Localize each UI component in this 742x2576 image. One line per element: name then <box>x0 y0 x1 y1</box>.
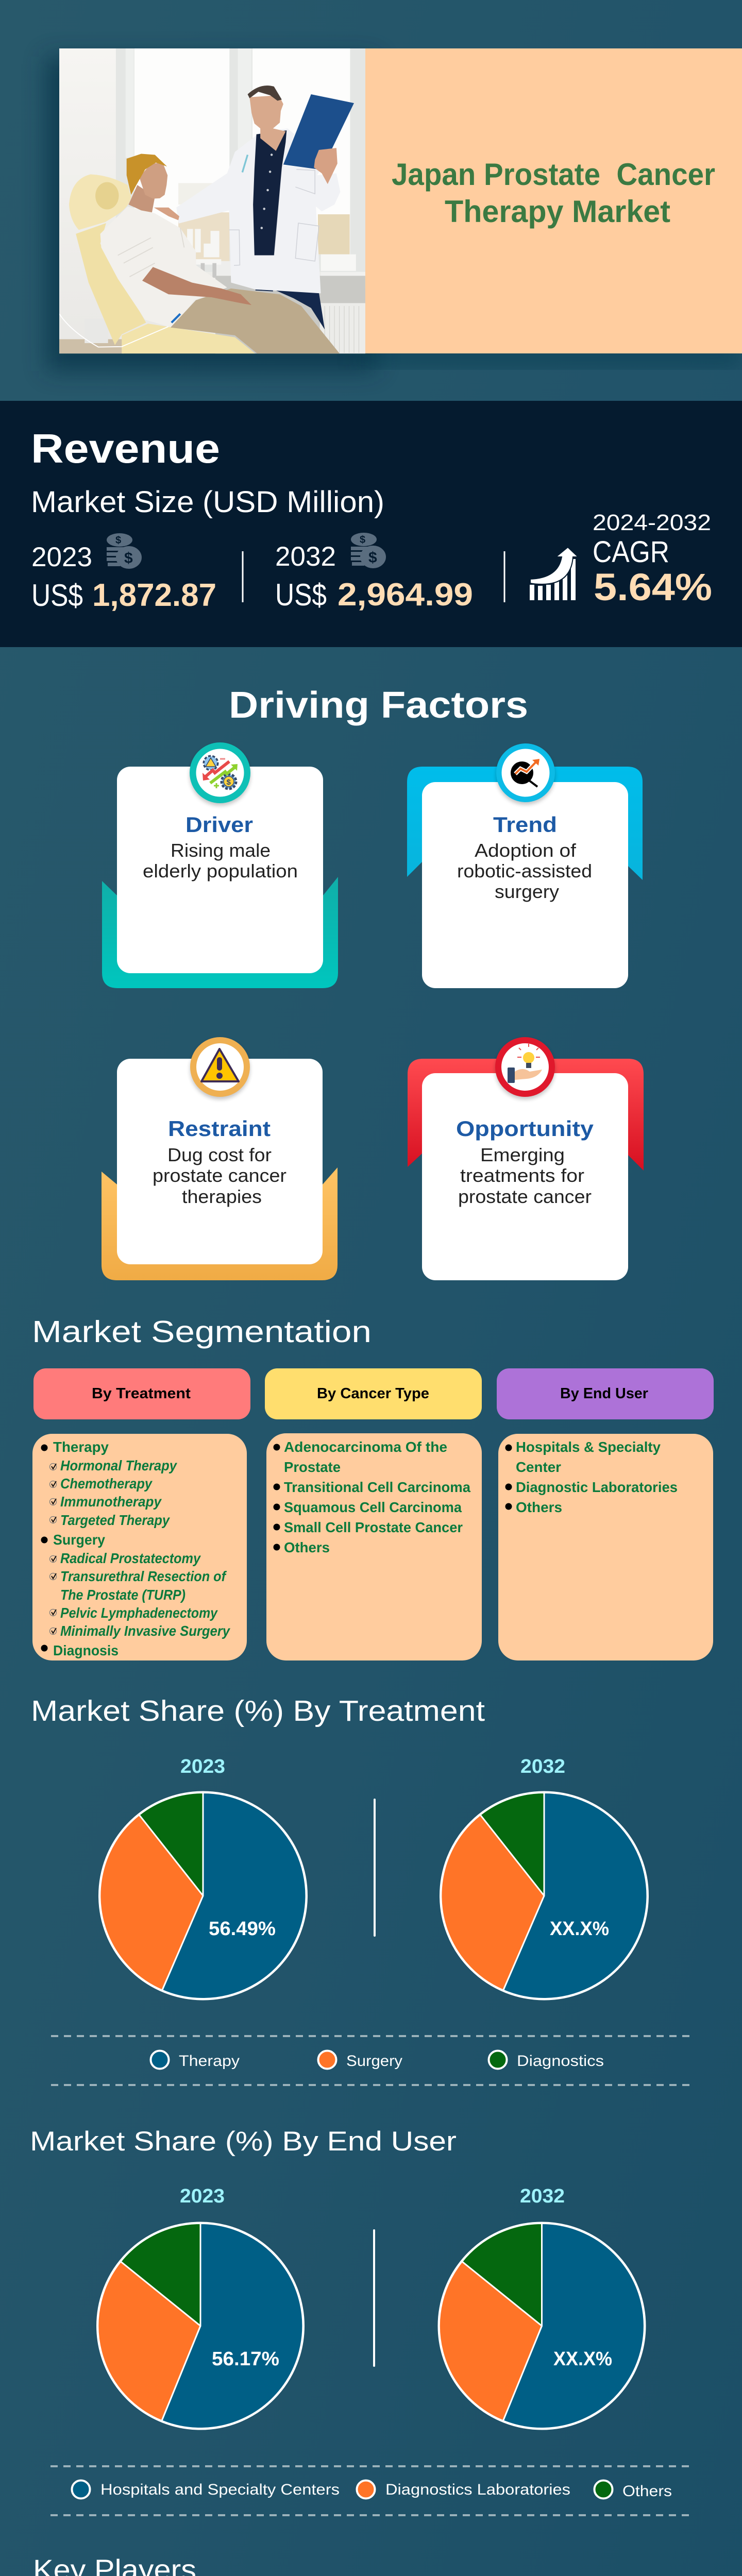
CAGR: CAGR <box>593 535 669 569</box>
text: restraint <box>153 1116 286 1207</box>
icon: driver arrows and gears <box>203 756 238 789</box>
bullets <box>505 1445 512 1510</box>
heading: revenue: Revenue <box>31 426 220 471</box>
list text: The Prostate (TURP) <box>60 1587 185 1603</box>
text: driver: elderly population <box>143 860 298 882</box>
chair <box>69 174 131 230</box>
icon: coins 2023 <box>107 533 142 569</box>
bullets <box>41 1445 47 1652</box>
segment header: by cancer type <box>265 1368 482 1419</box>
CAGR: 2024-2032 <box>593 510 711 535</box>
bullets <box>273 1444 280 1551</box>
text: trend: Adoption of <box>475 840 577 861</box>
chart: end user pie 2032 <box>439 2185 644 2429</box>
doctor shirt <box>253 130 286 256</box>
CAGR: 5.64% <box>594 566 712 608</box>
card: opportunity <box>408 1037 644 1280</box>
icon: coins 2023: $ <box>124 550 133 567</box>
revenue panel <box>0 401 742 647</box>
segment header: by end user: By End User <box>560 1385 648 1402</box>
list text: Transurethral Resection of <box>60 1568 227 1584</box>
segment header: by treatment: By Treatment <box>92 1385 191 1402</box>
list text: Targeted Therapy <box>60 1512 170 1528</box>
text: opportunity: Emerging <box>480 1144 565 1165</box>
icon: driver arrows and gears: $ <box>227 778 231 787</box>
legend: treatment: Diagnostics <box>517 2053 604 2070</box>
title: Therapy Market <box>445 194 670 229</box>
2032 value: 2,964.99 <box>338 577 473 613</box>
list text: Diagnostic Laboratories <box>516 1479 678 1495</box>
2032 value: US$ <box>275 578 327 612</box>
text: opportunity <box>456 1116 594 1207</box>
subheading: market size: Market Size (USD Million) <box>31 485 384 519</box>
text: driver: Rising male <box>171 840 271 861</box>
text: restraint: therapies <box>182 1186 262 1207</box>
2023 value: 2023 <box>31 542 92 572</box>
chart: end user pie 2023: 2023 <box>180 2185 225 2207</box>
legend: treatment: Surgery <box>346 2053 402 2070</box>
list text: Adenocarcinoma Of the <box>284 1439 447 1455</box>
CAGR <box>593 510 712 608</box>
list text <box>284 1439 470 1555</box>
legend: treatment <box>150 2050 604 2070</box>
chart: treatment pie 2032 <box>441 1756 647 1999</box>
list text: Squamous Cell Carcinoma <box>284 1499 462 1515</box>
legend: end user: Diagnostics Laboratories <box>385 2481 570 2498</box>
segment list: end user <box>498 1434 713 1660</box>
title panel <box>365 48 742 353</box>
2032 value: 2032 <box>275 541 336 572</box>
card: trend <box>407 743 643 988</box>
list text: Hormonal Therapy <box>60 1458 177 1473</box>
2032 value <box>275 541 473 613</box>
segment header: by cancer type: By Cancer Type <box>317 1385 429 1402</box>
cable <box>59 314 168 347</box>
segment list: treatment <box>32 1434 247 1660</box>
list text: Therapy <box>53 1439 109 1455</box>
list text: Prostate <box>284 1459 341 1475</box>
list text: Pelvic Lymphadenectomy <box>60 1605 218 1621</box>
card: driver <box>102 742 338 988</box>
heading: driving factors: Driving Factors <box>229 685 528 726</box>
list text: Small Cell Prostate Cancer <box>284 1519 463 1535</box>
text: opportunity: Opportunity <box>456 1116 594 1141</box>
heading: market share by treatment: Market Share (%) By Treatment <box>31 1694 485 1727</box>
doctor hands <box>154 148 338 220</box>
text: restraint: Dug cost for <box>167 1144 272 1165</box>
text: restraint: Restraint <box>168 1116 271 1141</box>
text: opportunity: treatments for <box>460 1165 584 1186</box>
doctor head <box>249 95 285 151</box>
divider <box>374 1799 376 1937</box>
chart: treatment pie 2023 <box>100 1756 306 1999</box>
icon: hand holding light bulb <box>508 1044 542 1083</box>
2023 value <box>31 542 216 613</box>
legend: end user: Hospitals and Specialty Centers <box>100 2481 340 2498</box>
list text: Hospitals & Specialty <box>516 1439 661 1455</box>
patient torso <box>100 207 227 328</box>
icon: coins 2032: $ <box>360 534 365 546</box>
divider <box>242 551 243 602</box>
list text: Others <box>516 1499 562 1515</box>
heading: market share by end user: Market Share (%) By End User <box>30 2126 457 2157</box>
chart: treatment pie 2032: XX.X% <box>550 1918 609 1940</box>
divider <box>373 2229 375 2367</box>
text: trend: surgery <box>495 881 559 902</box>
segment header: by treatment <box>33 1368 250 1419</box>
patient trousers <box>171 289 340 354</box>
chart: treatment pie 2023: 56.49% <box>209 1918 276 1940</box>
patient neck and face <box>128 185 155 212</box>
bottles and trolley <box>187 229 221 278</box>
2023 value: US$ <box>31 578 83 613</box>
title: Japan Prostate Cancer <box>392 157 715 192</box>
text: restraint: prostate cancer <box>153 1165 286 1186</box>
legend: treatment: Therapy <box>179 2053 240 2070</box>
list text: Others <box>284 1539 330 1555</box>
list text: Radical Prostatectomy <box>60 1550 201 1566</box>
doctor trousers <box>256 290 325 330</box>
divider <box>504 551 505 602</box>
text: opportunity: prostate cancer <box>458 1186 592 1207</box>
text: trend: Trend <box>493 812 557 837</box>
list text: Surgery <box>53 1532 105 1548</box>
icon: coins 2023: $ <box>115 535 121 546</box>
text: trend <box>457 812 592 902</box>
list text: Center <box>516 1459 561 1475</box>
doctor coat <box>176 128 340 293</box>
check marks <box>52 1464 56 1633</box>
chart: treatment pie 2023: 2023 <box>180 1756 225 1777</box>
2023 value: 1,872.87 <box>92 578 216 613</box>
icon: growth arrow <box>530 547 578 600</box>
list text: Transitional Cell Carcinoma <box>284 1479 470 1495</box>
icon: magnifier with trend line <box>511 759 539 787</box>
list text: Diagnosis <box>53 1642 119 1658</box>
check rings <box>49 1463 57 1634</box>
text: driver: Driver <box>185 812 253 837</box>
chart: end user pie 2023: 56.17% <box>212 2348 279 2370</box>
card: restraint <box>102 1037 338 1280</box>
icon: coins 2032 <box>351 533 386 568</box>
patient arm <box>142 267 251 305</box>
chart: end user pie 2032: 2032 <box>520 2185 565 2207</box>
clipboard <box>283 94 354 170</box>
segment header: by end user <box>497 1368 714 1419</box>
icon: warning triangle <box>201 1049 239 1081</box>
list text: Immunotherapy <box>60 1494 162 1510</box>
legend: end user <box>72 2480 672 2500</box>
beanie <box>127 154 167 195</box>
chart: end user pie 2032: XX.X% <box>553 2348 612 2370</box>
shirt buttons <box>261 154 273 229</box>
list text <box>516 1439 678 1515</box>
text: trend: robotic-assisted <box>457 860 592 882</box>
text: driver <box>143 812 298 882</box>
heading: market segmentation: Market Segmentation <box>32 1315 372 1349</box>
list text <box>53 1439 230 1658</box>
chart: end user pie 2023 <box>98 2185 303 2429</box>
list text: Chemotherapy <box>60 1476 153 1492</box>
segment list: cancer type <box>266 1433 482 1660</box>
photo: doctor and patient <box>59 48 365 354</box>
title <box>392 157 715 229</box>
list text: Minimally Invasive Surgery <box>60 1623 230 1639</box>
icon: coins 2032: $ <box>368 549 377 566</box>
stethoscope <box>242 155 248 173</box>
chart: treatment pie 2032: 2032 <box>520 1756 565 1777</box>
legend: end user: Others <box>622 2483 672 2500</box>
hero panel <box>46 48 742 371</box>
